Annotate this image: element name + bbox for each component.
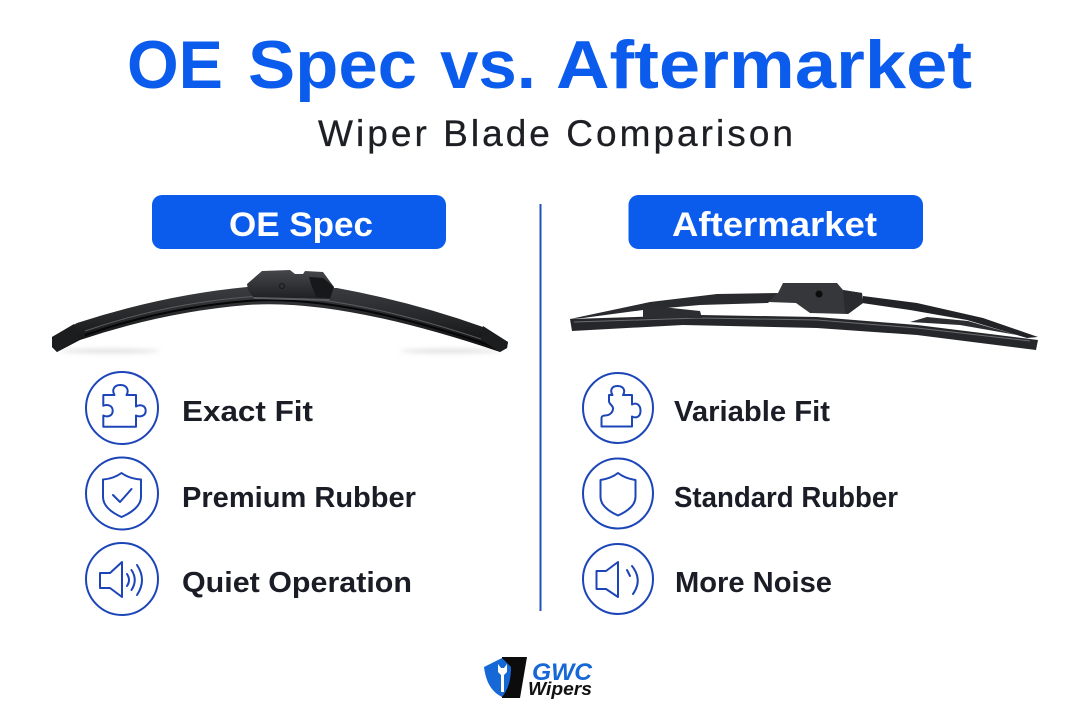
icon: puzzle piece bbox=[86, 372, 158, 444]
icon: plain shield bbox=[583, 458, 653, 528]
feature: Variable Fit bbox=[583, 373, 830, 443]
feature: Premium Rubber bbox=[86, 458, 416, 530]
panel: OE Spec bbox=[52, 195, 508, 615]
icon: speaker with faint waves bbox=[583, 544, 653, 614]
feature: Premium Rubber: Premium Rubber bbox=[182, 482, 416, 514]
feature: Quiet Operation: Quiet Operation bbox=[182, 567, 412, 599]
title: Aftermarket bbox=[556, 27, 972, 103]
icon: speaker with loud waves bbox=[86, 543, 158, 615]
image: beam wiper blade bbox=[52, 270, 508, 353]
badge: Aftermarket bbox=[628, 195, 923, 249]
icon: shield with wrench bbox=[484, 657, 527, 698]
subtitle: Wiper Blade Comparison bbox=[318, 113, 793, 154]
logo: GWC Wipers: GWC bbox=[532, 659, 593, 686]
logo: GWC Wipers: Wipers bbox=[528, 679, 592, 699]
divider bbox=[540, 204, 542, 611]
title: Spec bbox=[248, 27, 417, 103]
feature: More Noise bbox=[583, 544, 832, 614]
title: vs. bbox=[440, 27, 536, 103]
title: OE bbox=[127, 27, 223, 103]
icon: shield with check bbox=[86, 458, 158, 530]
feature: Standard Rubber: Standard Rubber bbox=[674, 482, 898, 514]
feature: Exact Fit bbox=[86, 372, 313, 444]
icon: puzzle piece, partial bbox=[583, 373, 653, 443]
badge: OE Spec bbox=[152, 195, 446, 249]
logo: GWC Wipers bbox=[484, 657, 593, 699]
badge: Aftermarket: Aftermarket bbox=[672, 206, 877, 244]
panel: Aftermarket bbox=[570, 195, 1038, 614]
feature: Standard Rubber bbox=[583, 458, 898, 528]
feature: Quiet Operation bbox=[86, 543, 412, 615]
title bbox=[127, 27, 972, 103]
badge: OE Spec: OE Spec bbox=[229, 206, 373, 244]
feature: Variable Fit: Variable Fit bbox=[674, 396, 830, 428]
image: conventional wiper blade bbox=[570, 283, 1038, 350]
feature: More Noise: More Noise bbox=[675, 567, 832, 599]
feature: Exact Fit: Exact Fit bbox=[182, 396, 313, 428]
